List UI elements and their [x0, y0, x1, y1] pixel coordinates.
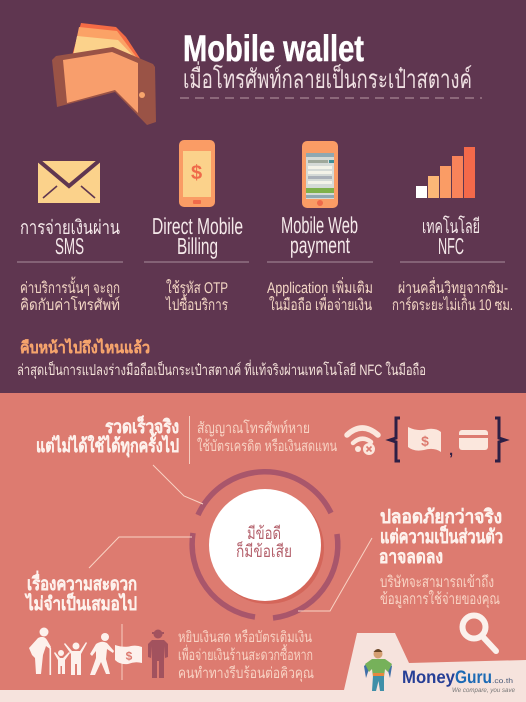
block: fast but not always: สัญญาณโทรศัพท์หาย: [197, 419, 310, 437]
description: Direct Mobile Billing: [164, 279, 228, 314]
icon: magnifier: [462, 616, 496, 651]
center text: [236, 524, 292, 561]
icon: left bracket: [390, 418, 400, 461]
block: convenience: ไม่จำเป็นเสมอไป: [24, 592, 137, 614]
connector: left: [89, 537, 192, 568]
description: Mobile Web payment: Application เพิ่มเติม: [267, 277, 373, 297]
block: fast but not always: แต่ไม่ได้ใช้ได้ทุกครั้งไป: [36, 432, 179, 458]
block: convenience: คนทำทางรีบร้อนต่อคิวคุณ: [178, 665, 314, 682]
heading: SMS: [20, 217, 120, 259]
block: convenience: หยิบเงินสด หรือบัตรเติมเงิน: [178, 629, 312, 646]
title: Mobile wallet: [183, 28, 364, 69]
heading: SMS: การจ่ายเงินผ่าน: [20, 217, 120, 239]
block: convenience: เพื่อจ่ายเงินร้านสะดวกซื้อหาก: [178, 644, 313, 664]
icon: phone with dollar: [179, 140, 215, 207]
panel: NFC technology: [392, 147, 513, 314]
mascot: [364, 649, 392, 691]
connector: top left: [153, 465, 203, 504]
domain: .co.th: [492, 677, 513, 685]
description: Direct Mobile Billing: ใช้รหัส OTP: [166, 279, 228, 297]
icon: phone with web form: [302, 141, 338, 208]
tagline: We compare, you save: [452, 687, 515, 694]
center text: มีข้อดี: [247, 524, 281, 543]
heading: Direct Mobile Billing: [152, 213, 243, 259]
heading: Mobile Web payment: Mobile Web: [281, 212, 358, 238]
icon: banknote in hand: [115, 645, 142, 664]
heading: Direct Mobile Billing: Billing: [177, 233, 218, 259]
description: Mobile Web payment: ในมือถือ เพื่อจ่ายเงิน: [269, 294, 372, 314]
chart: central circle with arcs: [192, 472, 338, 618]
heading: SMS: SMS: [55, 233, 84, 259]
icon: rising bars: [416, 147, 475, 198]
block: safer but less private: [379, 507, 503, 609]
icon: credit card: [459, 430, 488, 450]
icon: phone with dollar: $: [191, 162, 202, 184]
center text: ก็มีข้อเสีย: [236, 541, 292, 561]
block: fast but not always: [36, 415, 337, 464]
icon: banknote: [408, 427, 441, 452]
heading: Mobile Web payment: payment: [290, 232, 350, 258]
icon: queue of people: [29, 628, 114, 675]
heading: Mobile Web payment: [281, 212, 358, 258]
text block: progress: คืบหน้าไปถึงไหนแล้ว: [20, 338, 150, 357]
icon: waiting person: [148, 630, 168, 678]
description: NFC: [392, 277, 513, 314]
icon: right bracket: [495, 418, 505, 461]
heading: Direct Mobile Billing: Direct Mobile: [152, 213, 243, 239]
panel: Direct Mobile Billing: [144, 140, 249, 314]
heading: NFC: NFC: [438, 233, 464, 259]
description: Mobile Web payment: [267, 277, 373, 314]
title: [183, 28, 472, 94]
heading: NFC: เทคโนโลยี: [422, 215, 480, 238]
heading: NFC: [422, 215, 480, 259]
description: Direct Mobile Billing: ไปซื้อบริการ: [164, 293, 228, 314]
icon: banknote in hand: $: [126, 649, 133, 663]
wordmark: Money: [402, 667, 455, 687]
panel: salmon lower background: [0, 393, 526, 702]
panel: purple upper background: [0, 0, 526, 393]
connector: right: [298, 538, 372, 611]
icon: envelope: [38, 160, 100, 203]
description: SMS: [20, 276, 120, 314]
description: SMS: คิดกับค่าโทรศัพท์: [20, 296, 120, 314]
block: safer but less private: อาจลดลง: [379, 547, 443, 568]
wordmark: Guru: Guru: [455, 667, 492, 687]
block: convenience: [24, 570, 314, 682]
comma separator: ,: [449, 442, 453, 459]
panel: Mobile Web payment: [267, 141, 373, 314]
block: safer but less private: ปลอดภัยกว่าจริง: [380, 507, 502, 528]
logo: MoneyGuru: [364, 649, 515, 694]
description: SMS: ค่าบริการนั้นๆ จะถูก: [20, 276, 120, 298]
block: convenience: เรื่องความสะดวก: [27, 570, 137, 594]
icon: wallet phone: [52, 23, 156, 125]
panel: pale footer with logo notch: [0, 633, 526, 702]
block: fast but not always: รวดเร็วจริง: [105, 415, 179, 437]
panel: SMS payment: [17, 160, 123, 314]
icon: no wifi: [347, 428, 378, 455]
text block: progress: [17, 338, 426, 379]
icon: banknote: $: [421, 433, 429, 449]
block: fast but not always: ใช้บัตรเครดิต หรือเงินสดแทน: [197, 437, 337, 455]
